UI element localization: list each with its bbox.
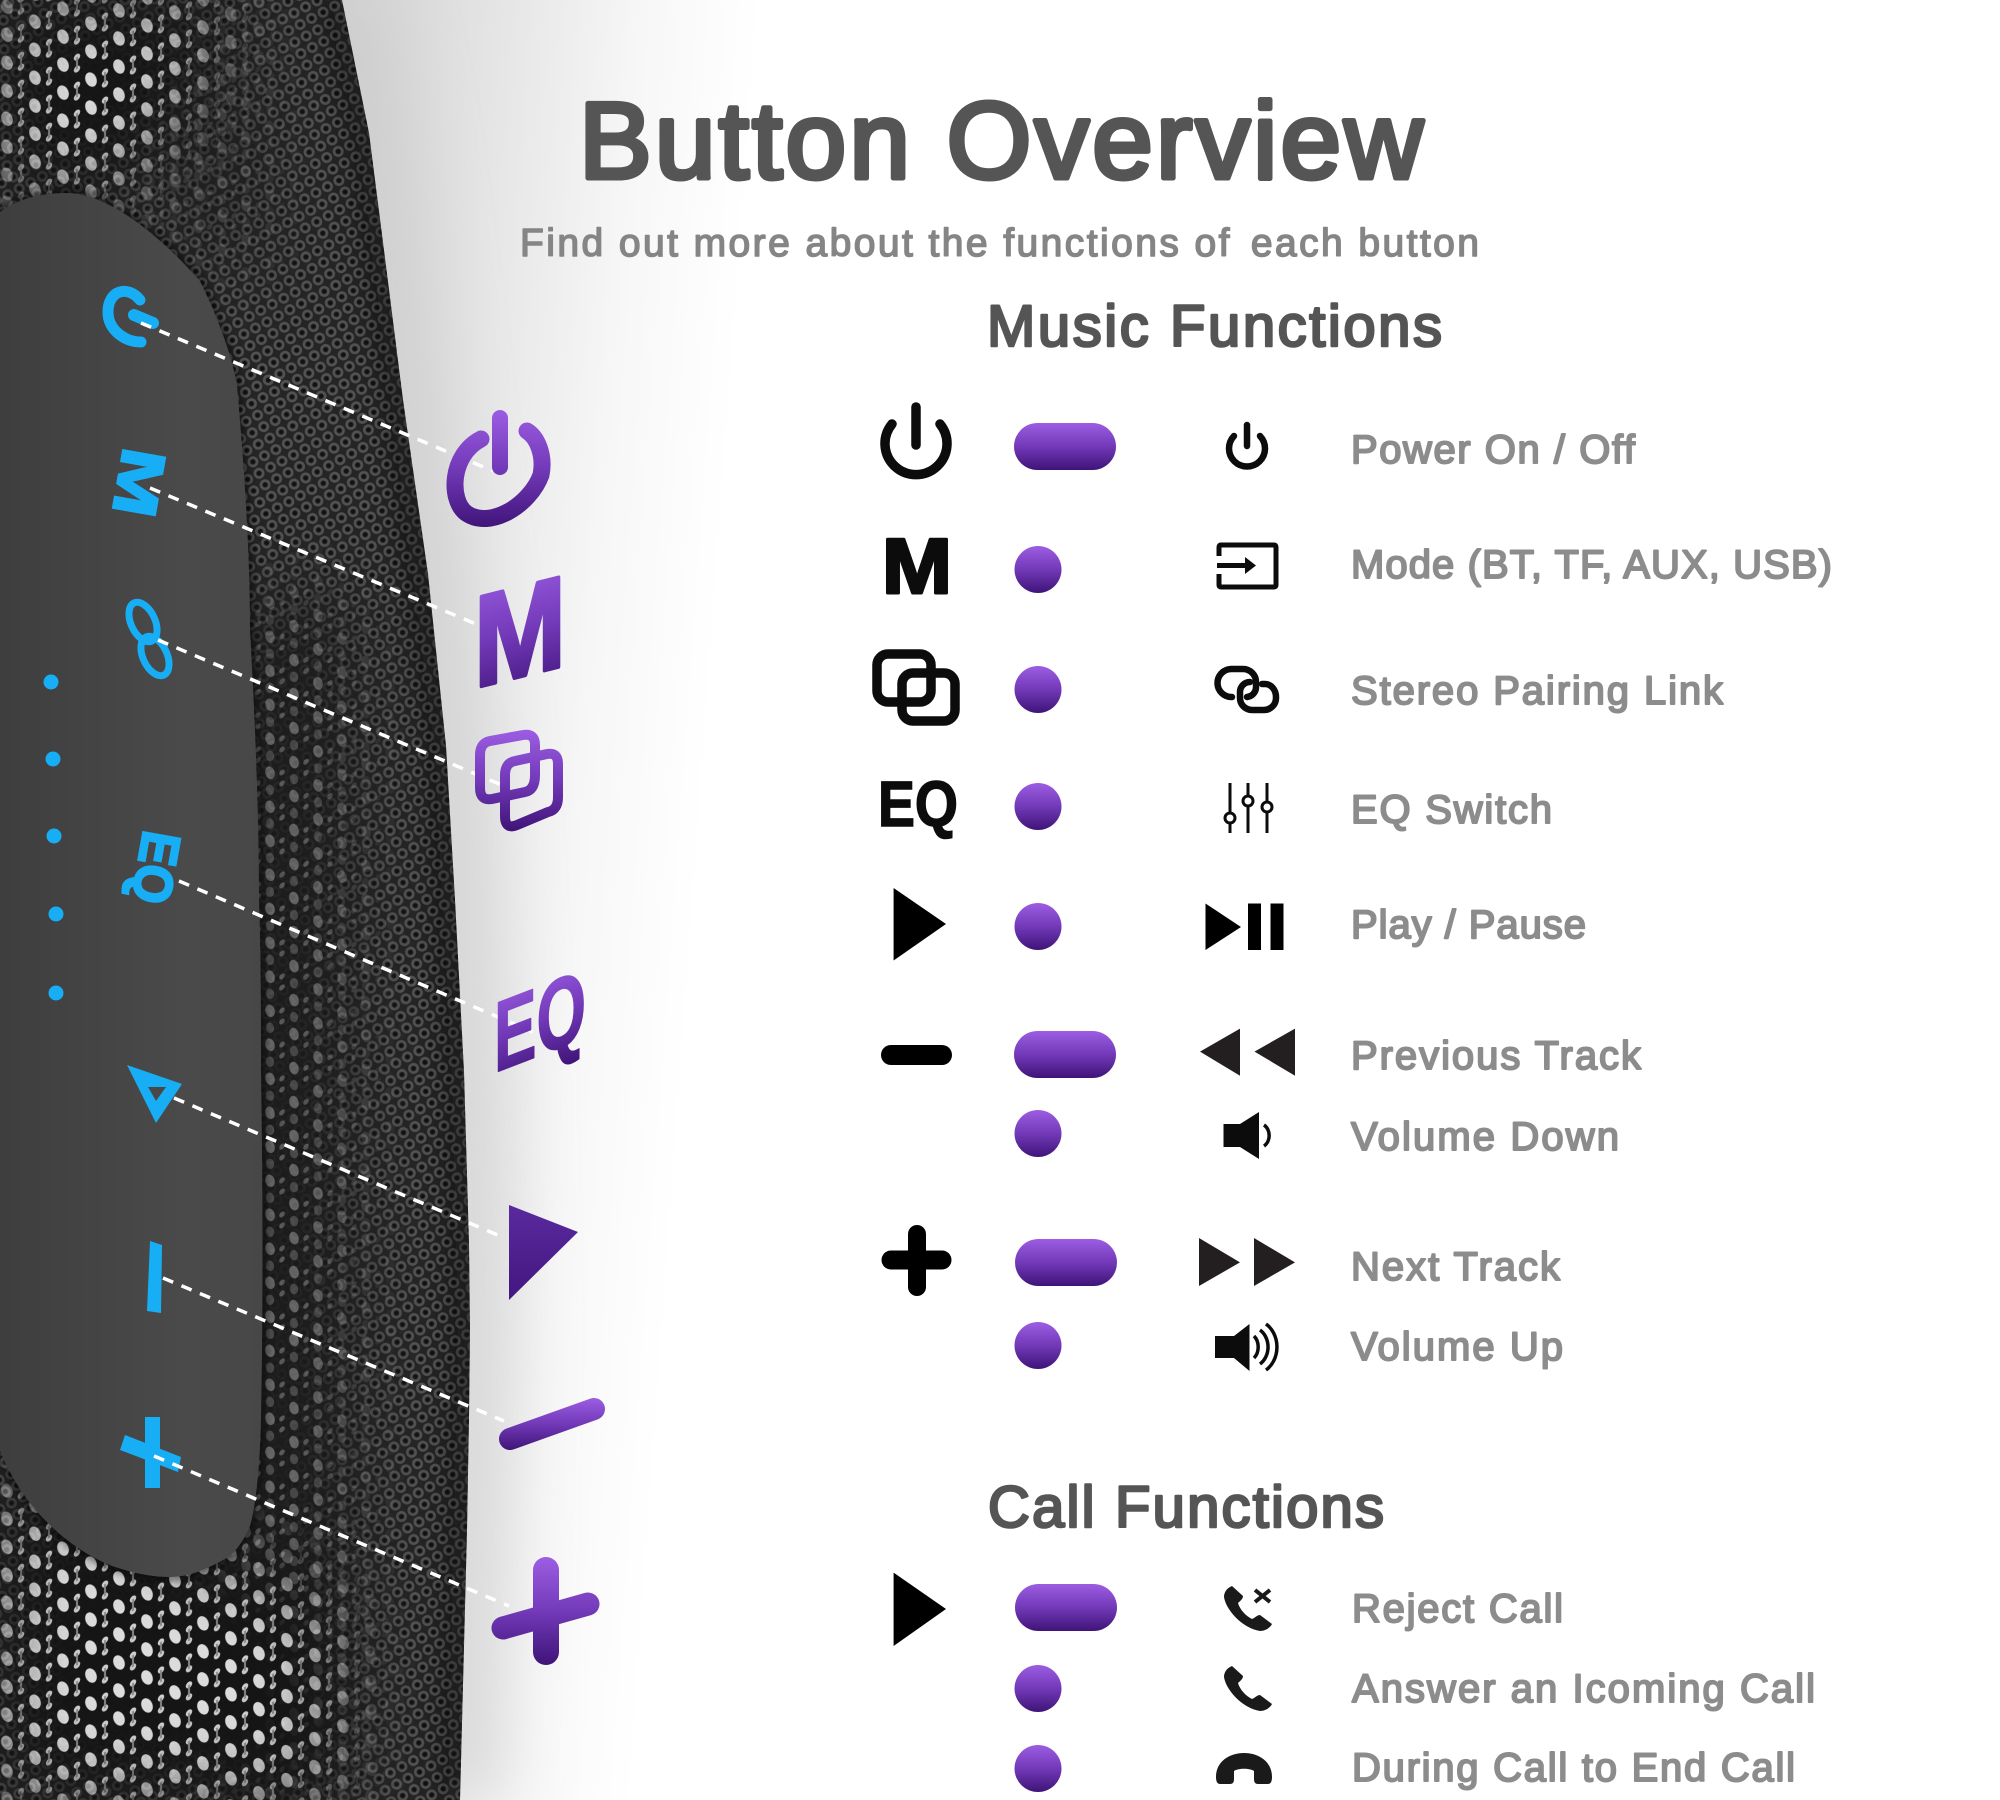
press indicator: short bbox=[1014, 1322, 1062, 1369]
press indicator: long bbox=[1015, 1239, 1117, 1286]
purple link icon bbox=[480, 735, 558, 826]
blue EQ icon: EQ bbox=[120, 827, 191, 908]
function icon: chain bbox=[1217, 669, 1276, 710]
label: Mode (BT, TF, AUX, USB) bbox=[1351, 543, 1832, 587]
blue triangle icon bbox=[127, 1065, 182, 1123]
function icon: forward bbox=[1199, 1238, 1295, 1286]
heading: music functions: Music Functions bbox=[987, 294, 1442, 359]
heading: call functions: Call Functions bbox=[988, 1475, 1384, 1540]
button glyph: power bbox=[885, 407, 947, 475]
row: previous track and volume down bbox=[891, 1029, 1642, 1159]
blue link icon bbox=[123, 598, 175, 680]
purple power icon bbox=[455, 418, 542, 519]
purple EQ icon: EQ bbox=[494, 947, 586, 1094]
row: power bbox=[885, 407, 1636, 475]
label: Volume Up bbox=[1351, 1325, 1563, 1369]
label: Play / Pause bbox=[1351, 903, 1586, 947]
function icon: volume up bbox=[1215, 1324, 1277, 1371]
row: answer call bbox=[1014, 1665, 1815, 1712]
five status dots bbox=[44, 674, 64, 1000]
label: Previous Track bbox=[1351, 1034, 1642, 1078]
label: EQ Switch bbox=[1351, 788, 1552, 832]
speaker body with fabric bbox=[0, 0, 520, 1800]
row: EQ bbox=[878, 768, 1552, 840]
label: Volume Down bbox=[1351, 1115, 1619, 1159]
label: Reject Call bbox=[1352, 1587, 1563, 1631]
press indicator: short bbox=[1014, 903, 1062, 950]
press indicator: short bbox=[1014, 666, 1062, 713]
function icon: phone reject bbox=[1224, 1586, 1272, 1631]
label: Answer an Icoming Call bbox=[1352, 1667, 1815, 1711]
press indicator: short bbox=[1014, 1665, 1062, 1712]
blue M icon: M bbox=[98, 443, 178, 523]
button glyph: minus bbox=[891, 1045, 942, 1065]
function icon: hang up bbox=[1216, 1753, 1272, 1784]
purple M icon: M bbox=[474, 548, 566, 716]
subtitle: Find out more about the functions of each button bbox=[520, 222, 1479, 265]
function icon: play pause bbox=[1206, 904, 1284, 950]
row: play bbox=[894, 888, 1586, 960]
row: mode bbox=[882, 522, 1832, 610]
row: reject call bbox=[894, 1573, 1563, 1646]
button glyph: M: M bbox=[882, 522, 952, 610]
row: stereo link bbox=[877, 654, 1724, 721]
shadow band beside speaker bbox=[342, 0, 470, 1800]
label: Stereo Pairing Link bbox=[1351, 669, 1724, 713]
row: next track and volume up bbox=[891, 1234, 1563, 1371]
press indicator: short bbox=[1014, 546, 1062, 593]
label: Power On / Off bbox=[1351, 428, 1636, 472]
press indicator: long bbox=[1015, 1584, 1117, 1631]
purple enlarged icons bbox=[455, 418, 594, 1652]
button glyph: play bbox=[894, 1573, 946, 1646]
press indicator: short bbox=[1014, 1110, 1062, 1157]
press indicator: short bbox=[1014, 783, 1062, 830]
control panel bbox=[0, 193, 262, 1577]
press indicator: short bbox=[1014, 1745, 1062, 1792]
label: During Call to End Call bbox=[1352, 1746, 1795, 1790]
blue panel icons bbox=[44, 291, 191, 1488]
row: end call bbox=[1014, 1745, 1795, 1792]
function icon: phone bbox=[1224, 1666, 1272, 1711]
purple plus icon bbox=[503, 1570, 588, 1652]
button glyph: play bbox=[894, 888, 946, 960]
function icon: input bbox=[1217, 545, 1276, 587]
function icon: rewind bbox=[1200, 1029, 1295, 1076]
blue plus icon bbox=[120, 1417, 181, 1488]
function icon: sliders bbox=[1225, 783, 1272, 833]
blue power icon bbox=[108, 291, 153, 342]
button glyph: overlapping squares bbox=[877, 654, 955, 721]
function icon: power bbox=[1229, 425, 1265, 466]
button glyph: EQ: EQ bbox=[878, 768, 958, 840]
purple minus icon bbox=[510, 1409, 594, 1439]
button glyph: plus bbox=[891, 1234, 942, 1287]
purple play icon bbox=[509, 1205, 578, 1300]
press indicator: long bbox=[1014, 423, 1116, 470]
label: Next Track bbox=[1351, 1245, 1561, 1289]
title: Button Overview bbox=[579, 80, 1423, 202]
function icon: volume down bbox=[1224, 1112, 1269, 1159]
blue minus icon bbox=[147, 1241, 162, 1313]
dashed leader lines bbox=[141, 323, 533, 1606]
press indicator: long bbox=[1014, 1031, 1116, 1078]
